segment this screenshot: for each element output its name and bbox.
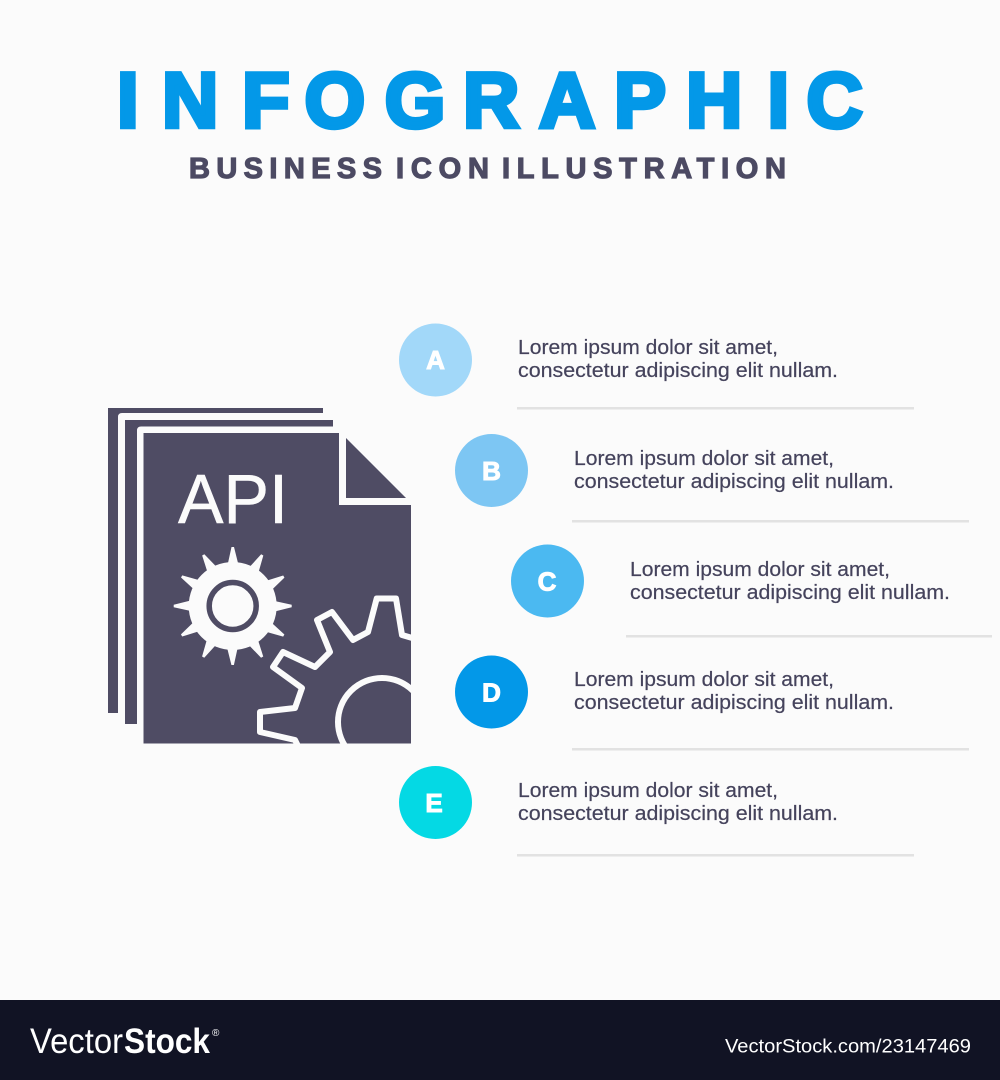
text E: Lorem ipsum dolor sit amet, bbox=[518, 780, 778, 802]
subtitle: BUSINESS bbox=[189, 153, 382, 185]
badge D bbox=[455, 656, 528, 728]
API label: API bbox=[178, 460, 288, 538]
front sheet bbox=[144, 433, 411, 744]
footer id: VectorStock.com/23147469 bbox=[725, 1036, 971, 1058]
subtitle: ILLUSTRATION bbox=[502, 153, 786, 185]
middle sheet bbox=[125, 420, 333, 724]
text C: consectetur adipiscing elit nullam. bbox=[630, 582, 950, 604]
back sheet bbox=[108, 408, 323, 713]
badge E bbox=[399, 766, 472, 839]
subtitle: ICON bbox=[396, 153, 489, 185]
badge A bbox=[399, 324, 472, 396]
step E bbox=[399, 766, 914, 856]
divider D bbox=[572, 748, 969, 750]
badge D: D bbox=[482, 678, 501, 708]
text C: Lorem ipsum dolor sit amet, bbox=[630, 559, 890, 581]
small gear bbox=[174, 547, 292, 665]
divider C bbox=[626, 635, 992, 638]
icon: API documents with gears bbox=[108, 408, 411, 744]
badge B: B bbox=[482, 456, 501, 486]
text D: Lorem ipsum dolor sit amet, bbox=[574, 669, 834, 691]
badge C bbox=[511, 544, 584, 618]
text E: consectetur adipiscing elit nullam. bbox=[518, 803, 838, 825]
step B bbox=[455, 434, 969, 522]
large gear outline bbox=[257, 596, 411, 744]
badge C: C bbox=[538, 566, 557, 596]
step C bbox=[511, 544, 992, 638]
step A bbox=[399, 324, 914, 410]
footer logo: Vector bbox=[30, 1022, 123, 1061]
badge A: A bbox=[426, 345, 445, 375]
title: INFOGRAPHIC bbox=[117, 56, 863, 144]
text B: consectetur adipiscing elit nullam. bbox=[574, 471, 894, 493]
text B: Lorem ipsum dolor sit amet, bbox=[574, 448, 834, 470]
step D bbox=[455, 656, 969, 750]
badge E: E bbox=[425, 788, 443, 818]
badge B bbox=[455, 434, 528, 507]
footer bar bbox=[0, 1000, 1000, 1080]
text A: consectetur adipiscing elit nullam. bbox=[518, 360, 838, 382]
folded corner bbox=[346, 438, 406, 498]
text A: Lorem ipsum dolor sit amet, bbox=[518, 337, 778, 359]
divider B bbox=[572, 520, 969, 522]
footer logo: ® bbox=[212, 1028, 220, 1039]
divider E bbox=[517, 854, 914, 856]
divider A bbox=[517, 407, 914, 410]
footer logo: Stock bbox=[124, 1022, 210, 1061]
text D: consectetur adipiscing elit nullam. bbox=[574, 692, 894, 714]
